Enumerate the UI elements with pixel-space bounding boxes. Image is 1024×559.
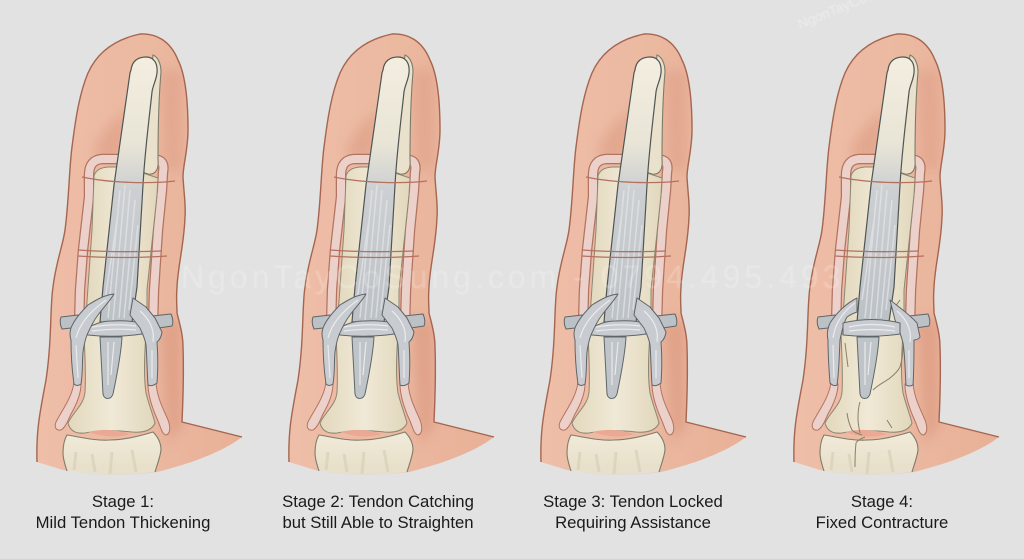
caption: stage 2: Stage 2: Tendon Catching [282, 492, 474, 511]
lower bone [825, 334, 912, 433]
joint gap [845, 430, 887, 437]
tendon sheath [583, 159, 667, 325]
finger skin [289, 34, 494, 475]
middle bone [589, 167, 662, 330]
A1 pulley and tendon slips [60, 294, 173, 398]
middle bone [85, 167, 158, 330]
skin shading [346, 70, 434, 445]
middle bone [842, 167, 915, 330]
rear distal bone [646, 55, 665, 174]
tendon sheath [331, 159, 415, 325]
sheath tails [812, 382, 927, 435]
bone cracks [845, 300, 903, 467]
rear distal bone [899, 55, 918, 174]
middle bone [337, 167, 410, 330]
annular rings [78, 177, 175, 258]
tendon fibers [609, 185, 642, 320]
A1 pulley and tendon slips [312, 294, 425, 398]
caption: stage 1: Mild Tendon Thickening [36, 513, 210, 532]
annular rings [330, 177, 427, 258]
finger skin [37, 34, 242, 475]
tendon sheath [836, 159, 920, 325]
pulley highlights [76, 300, 153, 385]
pulley and tendon slips, closed arch [817, 298, 930, 398]
joint gap [88, 430, 130, 437]
joint gap [592, 430, 634, 437]
sheath tails [307, 382, 422, 435]
caption: stage 4: Fixed Contracture [816, 513, 948, 532]
tendon fibers [357, 185, 390, 320]
joint gap [340, 430, 382, 437]
caption: stage 2: but Still Able to Straighten [282, 513, 474, 532]
base bone edge [63, 432, 161, 472]
lower bone [320, 334, 407, 433]
lower bone [68, 334, 155, 433]
sheath tails [559, 382, 674, 435]
skin outline [541, 34, 746, 462]
pulley highlights [833, 303, 910, 385]
flexor tendon shaft [604, 57, 661, 322]
base bone [63, 432, 161, 475]
caption: stage 4: Stage 4: [851, 492, 913, 511]
tendon sheath [79, 159, 163, 325]
base bone texture [74, 450, 136, 474]
base bone edge [820, 432, 918, 472]
base bone texture [831, 450, 893, 474]
lower bone [572, 334, 659, 433]
panel: stage 4 finger [794, 34, 999, 475]
panel: stage 1 finger [37, 34, 242, 475]
skin shading [598, 70, 686, 445]
A1 pulley and tendon slips [564, 294, 677, 398]
panel: stage 2 finger [289, 34, 494, 475]
skin outline [37, 34, 242, 462]
caption: stage 3: Stage 3: Tendon Locked [543, 492, 723, 511]
caption: stage 3: Requiring Assistance [555, 513, 711, 532]
panel: stage 3 finger [541, 34, 746, 475]
finger skin [794, 34, 999, 475]
base bone [315, 432, 413, 475]
rear distal bone [394, 55, 413, 174]
skin outline [289, 34, 494, 462]
pulley highlights [580, 300, 657, 385]
skin shading [851, 70, 939, 445]
base bone [567, 432, 665, 475]
caption: stage 1: Stage 1: [92, 492, 154, 511]
watermark: NgonTayCoSung.com - 0794.495.493 [181, 259, 844, 295]
finger skin [541, 34, 746, 475]
rear distal bone [142, 55, 161, 174]
annular rings [835, 177, 932, 258]
flexor tendon shaft [100, 57, 157, 322]
pulley highlights [328, 300, 405, 385]
sheath tails [55, 382, 170, 435]
annular rings [582, 177, 679, 258]
base bone edge [315, 432, 413, 472]
tendon fibers [862, 185, 895, 320]
flexor tendon shaft [352, 57, 409, 322]
base bone texture [326, 450, 388, 474]
base bone texture [578, 450, 640, 474]
tendon fibers [105, 185, 138, 320]
skin outline [794, 34, 999, 462]
flexor tendon shaft [857, 57, 914, 322]
skin shading [94, 70, 182, 445]
base bone edge [567, 432, 665, 472]
base bone [820, 432, 918, 475]
